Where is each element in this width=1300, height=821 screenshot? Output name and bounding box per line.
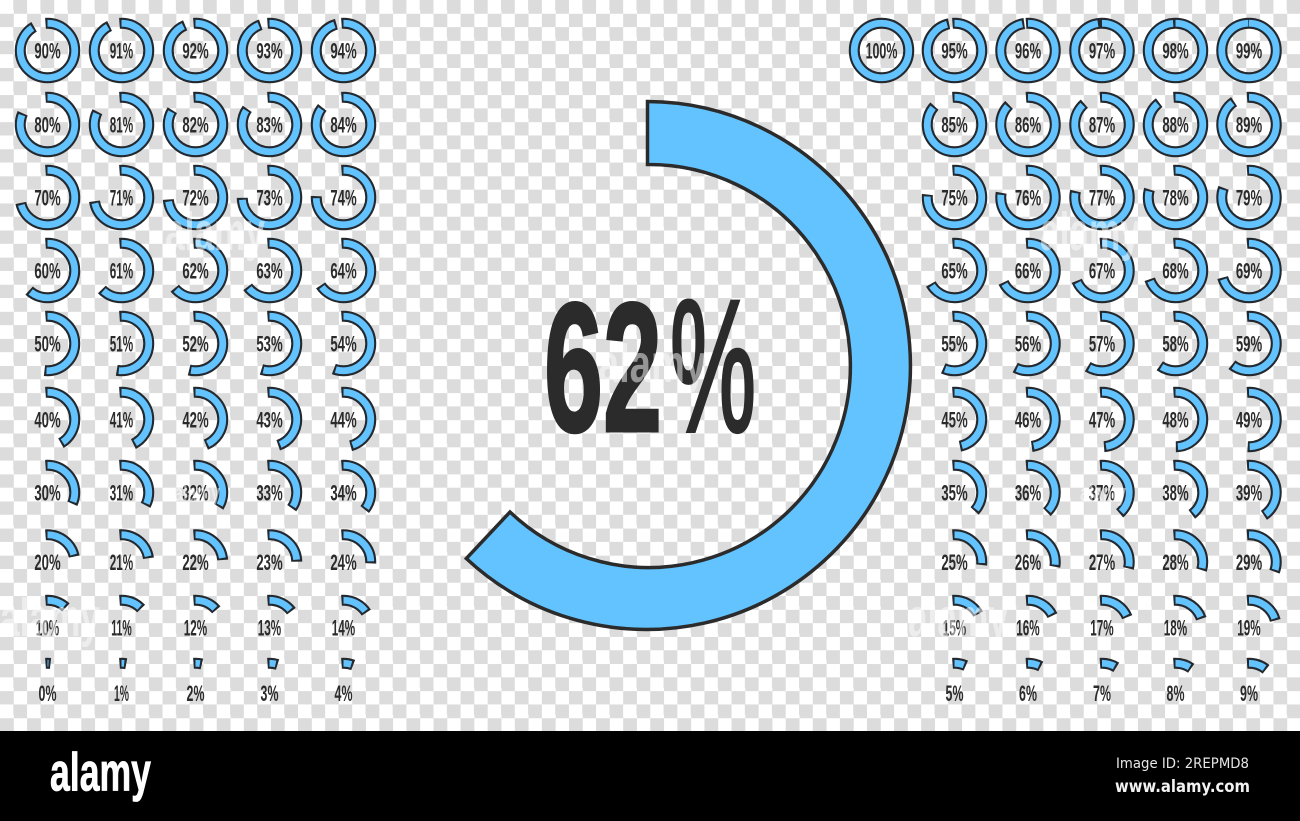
ring: 80%: 80% — [34, 112, 61, 138]
ring: 8%: 8% — [1167, 681, 1184, 706]
ring: 10%: 10% — [36, 616, 59, 640]
ring: 78% — [1148, 170, 1203, 225]
ring: 47%: 47% — [1089, 408, 1115, 432]
ring: 32% — [168, 465, 223, 520]
ring: 69% — [1222, 243, 1276, 298]
ring: 85%: 85% — [941, 112, 968, 138]
ring: 24%: 24% — [330, 550, 357, 575]
ring: 17%: 17% — [1090, 616, 1114, 640]
ring: 68%: 68% — [1162, 258, 1189, 284]
ring: 50%: 50% — [34, 332, 61, 356]
ring: 48% — [1148, 392, 1203, 447]
ring: 36%: 36% — [1015, 480, 1041, 506]
ring: 15% — [927, 600, 982, 655]
ring: 35%: 35% — [941, 480, 968, 506]
ring: 99%: 99% — [1236, 38, 1262, 64]
ring: 78%: 78% — [1162, 186, 1189, 210]
ring: 89% — [1222, 97, 1276, 152]
ring: 40% — [20, 392, 75, 447]
ring: 14% — [316, 600, 371, 655]
ring: 53% — [242, 316, 297, 371]
ring: 64%: 64% — [330, 258, 357, 284]
ring: 34% — [316, 465, 371, 520]
ring: 29%: 29% — [1236, 550, 1262, 575]
ring: 30%: 30% — [34, 480, 61, 506]
footer bar — [0, 731, 1300, 821]
ring: 71% — [94, 170, 149, 225]
ring: 2%: 2% — [187, 681, 204, 706]
ring: 29% — [1222, 535, 1276, 589]
ring: 48%: 48% — [1162, 408, 1189, 432]
watermarks: alamy — [1040, 202, 1140, 262]
ring: 61% — [94, 243, 149, 298]
ring: 45%: 45% — [941, 408, 968, 432]
ring: 71%: 71% — [110, 186, 133, 210]
ring: 62%: 62% — [182, 258, 209, 284]
watermarks — [0, 202, 1140, 648]
ring: 72% — [168, 170, 223, 225]
ring: 100% — [854, 23, 909, 78]
watermarks: alamy — [0, 588, 100, 648]
ring: 69%: 69% — [1236, 258, 1262, 284]
ring: 17% — [1075, 600, 1129, 655]
ring: 91% — [94, 23, 149, 78]
image id: Image ID: 2REPMD8 — [1116, 756, 1249, 772]
ring: 49% — [1222, 392, 1276, 447]
ring: 82% — [168, 97, 223, 152]
ring: 27% — [1075, 535, 1129, 589]
ring: 94%: 94% — [330, 38, 357, 64]
website: www.alamy.com — [1115, 777, 1250, 797]
ring: 76%: 76% — [1015, 186, 1041, 210]
ring: 25% — [927, 535, 982, 589]
ring: 44%: 44% — [330, 408, 357, 432]
ring: 11% — [94, 600, 149, 655]
ring: 46% — [1001, 392, 1055, 447]
ring: 26%: 26% — [1015, 550, 1041, 575]
ring: 20% — [20, 535, 75, 589]
large central ring: 62% — [466, 102, 910, 629]
ring: 98%: 98% — [1162, 38, 1189, 64]
ring: 73%: 73% — [256, 186, 283, 210]
ring: 51% — [94, 316, 149, 371]
footer logo: alamy — [50, 742, 151, 802]
ring: 87%: 87% — [1089, 112, 1115, 138]
ring: 6%: 6% — [1019, 681, 1037, 706]
ring: 87% — [1075, 97, 1129, 152]
ring: 14%: 14% — [332, 616, 355, 640]
ring: 60%: 60% — [34, 258, 61, 284]
ring: 39% — [1222, 465, 1276, 520]
ring: 32%: 32% — [182, 480, 209, 506]
ring: 7%: 7% — [1093, 681, 1111, 706]
ring: 55%: 55% — [941, 332, 968, 356]
ring: 21% — [94, 535, 149, 589]
ring: 46%: 46% — [1015, 408, 1041, 432]
ring: 2% — [168, 663, 223, 718]
ring: 82%: 82% — [182, 112, 209, 138]
ring: 74%: 74% — [330, 186, 357, 210]
watermarks: alamy — [165, 202, 265, 262]
ring: 63%: 63% — [256, 258, 283, 284]
ring: 52%: 52% — [182, 332, 209, 356]
right ring grid 5-100% — [854, 23, 1276, 718]
ring: 93%: 93% — [256, 38, 283, 64]
ring: 83%: 83% — [256, 112, 283, 138]
ring: 85% — [927, 97, 982, 152]
ring: 35% — [927, 465, 982, 520]
ring: 79%: 79% — [1236, 186, 1262, 210]
ring: 81%: 81% — [110, 112, 133, 138]
ring: 77%: 77% — [1089, 186, 1115, 210]
ring: 16% — [1001, 600, 1055, 655]
ring: 1%: 1% — [114, 681, 129, 706]
ring: 24% — [316, 535, 371, 589]
ring: 92%: 92% — [182, 38, 209, 64]
ring: 51%: 51% — [110, 332, 133, 356]
ring: 0%: 0% — [39, 681, 56, 706]
ring: 9%: 9% — [1240, 681, 1258, 706]
ring: 65%: 65% — [941, 258, 968, 284]
ring: 1% — [94, 663, 149, 718]
ring: 62% — [168, 243, 223, 298]
ring: 99% — [1222, 23, 1276, 78]
ring: 81% — [94, 97, 149, 152]
ring: 0% — [20, 663, 75, 718]
ring: 96% — [1001, 23, 1055, 78]
large percent sign: % — [670, 261, 756, 471]
ring: 16%: 16% — [1016, 616, 1040, 640]
ring: 84% — [316, 97, 371, 152]
ring: 9% — [1222, 663, 1276, 718]
ring: 23% — [242, 535, 297, 589]
ring: 20%: 20% — [34, 550, 61, 575]
ring: 92% — [168, 23, 223, 78]
ring: 80% — [20, 97, 75, 152]
ring: 10% — [20, 600, 75, 655]
ring: 88% — [1148, 97, 1203, 152]
ring: 50% — [20, 316, 75, 371]
ring: 37%: 37% — [1089, 480, 1115, 506]
ring: 19% — [1222, 600, 1276, 655]
ring: 66%: 66% — [1015, 258, 1041, 284]
ring: 67%: 67% — [1089, 258, 1115, 284]
ring: 63% — [242, 243, 297, 298]
ring: 59%: 59% — [1236, 332, 1262, 356]
ring: 40%: 40% — [34, 408, 61, 432]
ring: 53%: 53% — [256, 332, 283, 356]
ring: 34%: 34% — [330, 480, 357, 506]
ring: 18% — [1148, 600, 1203, 655]
ring: 22%: 22% — [182, 550, 209, 575]
ring: 84%: 84% — [330, 112, 357, 138]
ring: 77% — [1075, 170, 1129, 225]
ring: 83% — [242, 97, 297, 152]
ring: 37% — [1075, 465, 1129, 520]
ring: 60% — [20, 243, 75, 298]
ring: 11%: 11% — [111, 616, 132, 640]
ring: 56%: 56% — [1015, 332, 1041, 356]
ring: 55% — [927, 316, 982, 371]
ring: 57% — [1075, 316, 1129, 371]
ring: 27%: 27% — [1089, 550, 1115, 575]
ring: 79% — [1222, 170, 1276, 225]
ring: 95% — [927, 23, 982, 78]
ring: 12%: 12% — [184, 616, 207, 640]
ring: 61%: 61% — [110, 258, 133, 284]
ring: 67% — [1075, 243, 1129, 298]
ring: 42% — [168, 392, 223, 447]
watermarks: alamy — [908, 588, 1008, 648]
ring: 25%: 25% — [941, 550, 968, 575]
ring: 52% — [168, 316, 223, 371]
ring: 15%: 15% — [943, 616, 966, 640]
ring: 33%: 33% — [256, 480, 283, 506]
ring: 66% — [1001, 243, 1055, 298]
ring: 56% — [1001, 316, 1055, 371]
ring: 93% — [242, 23, 297, 78]
ring: 8% — [1148, 663, 1203, 718]
ring: 4% — [316, 663, 371, 718]
ring: 38%: 38% — [1162, 480, 1189, 506]
ring: 98% — [1148, 23, 1203, 78]
ring: 22% — [168, 535, 223, 589]
ring: 97%: 97% — [1089, 38, 1115, 64]
ring: 72%: 72% — [182, 186, 209, 210]
ring: 86%: 86% — [1015, 112, 1041, 138]
ring: 45% — [927, 392, 982, 447]
watermarks: alamy — [598, 334, 706, 394]
left ring grid 0-94% — [20, 23, 371, 718]
ring: 5% — [927, 663, 982, 718]
ring: 7% — [1075, 663, 1129, 718]
ring: 19%: 19% — [1237, 616, 1261, 640]
ring: 31% — [94, 465, 149, 520]
ring: 42%: 42% — [182, 408, 209, 432]
ring: 59% — [1222, 316, 1276, 371]
ring: 57%: 57% — [1089, 332, 1115, 356]
ring: 90% — [20, 23, 75, 78]
ring: 54% — [316, 316, 371, 371]
ring: 13%: 13% — [258, 616, 281, 640]
ring: 75% — [927, 170, 982, 225]
ring: 88%: 88% — [1162, 112, 1189, 138]
ring: 43% — [242, 392, 297, 447]
ring: 18%: 18% — [1164, 616, 1187, 640]
ring: 64% — [316, 243, 371, 298]
ring: 70%: 70% — [34, 186, 61, 210]
ring: 41%: 41% — [110, 408, 133, 432]
ring: 94% — [316, 23, 371, 78]
ring: 36% — [1001, 465, 1055, 520]
ring: 26% — [1001, 535, 1055, 589]
ring: 31%: 31% — [110, 480, 133, 506]
watermarks: alamy — [1080, 480, 1126, 507]
ring: 6% — [1001, 663, 1055, 718]
ring: 96%: 96% — [1015, 38, 1041, 64]
ring: 38% — [1148, 465, 1203, 520]
large central value: 62%: 62 — [544, 264, 662, 470]
ring: 3% — [242, 663, 297, 718]
ring: 100%: 100% — [866, 38, 897, 64]
ring: 43%: 43% — [256, 408, 283, 432]
ring: 54%: 54% — [330, 332, 357, 356]
ring: 58%: 58% — [1162, 332, 1189, 356]
ring: 90%: 90% — [34, 38, 61, 64]
ring: 21%: 21% — [110, 550, 133, 575]
ring: 39%: 39% — [1236, 480, 1262, 506]
ring: 76% — [1001, 170, 1055, 225]
watermarks: alamy — [174, 480, 220, 507]
ring: 47% — [1075, 392, 1129, 447]
ring: 49%: 49% — [1236, 408, 1262, 432]
ring: 33% — [242, 465, 297, 520]
ring: 5%: 5% — [946, 681, 963, 706]
ring: 95%: 95% — [941, 38, 968, 64]
ring: 3%: 3% — [261, 681, 278, 706]
ring: 86% — [1001, 97, 1055, 152]
ring: 28%: 28% — [1162, 550, 1189, 575]
ring: 89%: 89% — [1236, 112, 1262, 138]
ring: 13% — [242, 600, 297, 655]
ring: 58% — [1148, 316, 1203, 371]
ring: 28% — [1148, 535, 1203, 589]
ring: 30% — [20, 465, 75, 520]
ring: 73% — [242, 170, 297, 225]
ring: 12% — [168, 600, 223, 655]
ring: 65% — [927, 243, 982, 298]
ring: 97% — [1075, 23, 1129, 78]
ring: 74% — [316, 170, 371, 225]
ring: 4%: 4% — [335, 681, 352, 706]
ring: 44% — [316, 392, 371, 447]
ring: 91%: 91% — [110, 38, 133, 64]
ring: 68% — [1148, 243, 1203, 298]
ring: 23%: 23% — [256, 550, 283, 575]
ring: 70% — [20, 170, 75, 225]
ring: 41% — [94, 392, 149, 447]
ring: 75%: 75% — [941, 186, 968, 210]
